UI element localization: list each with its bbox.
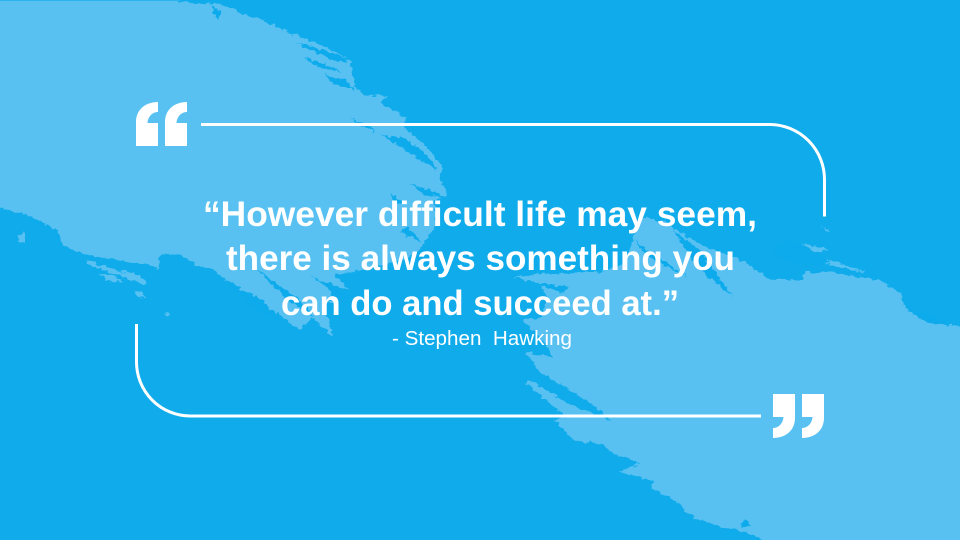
top edge strip — [0, 0, 180, 1]
frame line: bottom left — [136, 324, 761, 416]
quote text — [203, 195, 757, 323]
closing quote mark — [773, 394, 824, 438]
frame line: top right — [201, 124, 825, 216]
quote text: “However difficult life may seem, — [203, 195, 757, 234]
brush stroke: lower right — [513, 217, 960, 540]
attribution: - Stephen Hawking — [392, 328, 572, 350]
quote text: can do and succeed at.” — [281, 284, 679, 323]
quote text: there is always something you — [226, 239, 735, 278]
opening quote mark — [136, 102, 187, 146]
brush stroke: upper left — [0, 0, 448, 336]
